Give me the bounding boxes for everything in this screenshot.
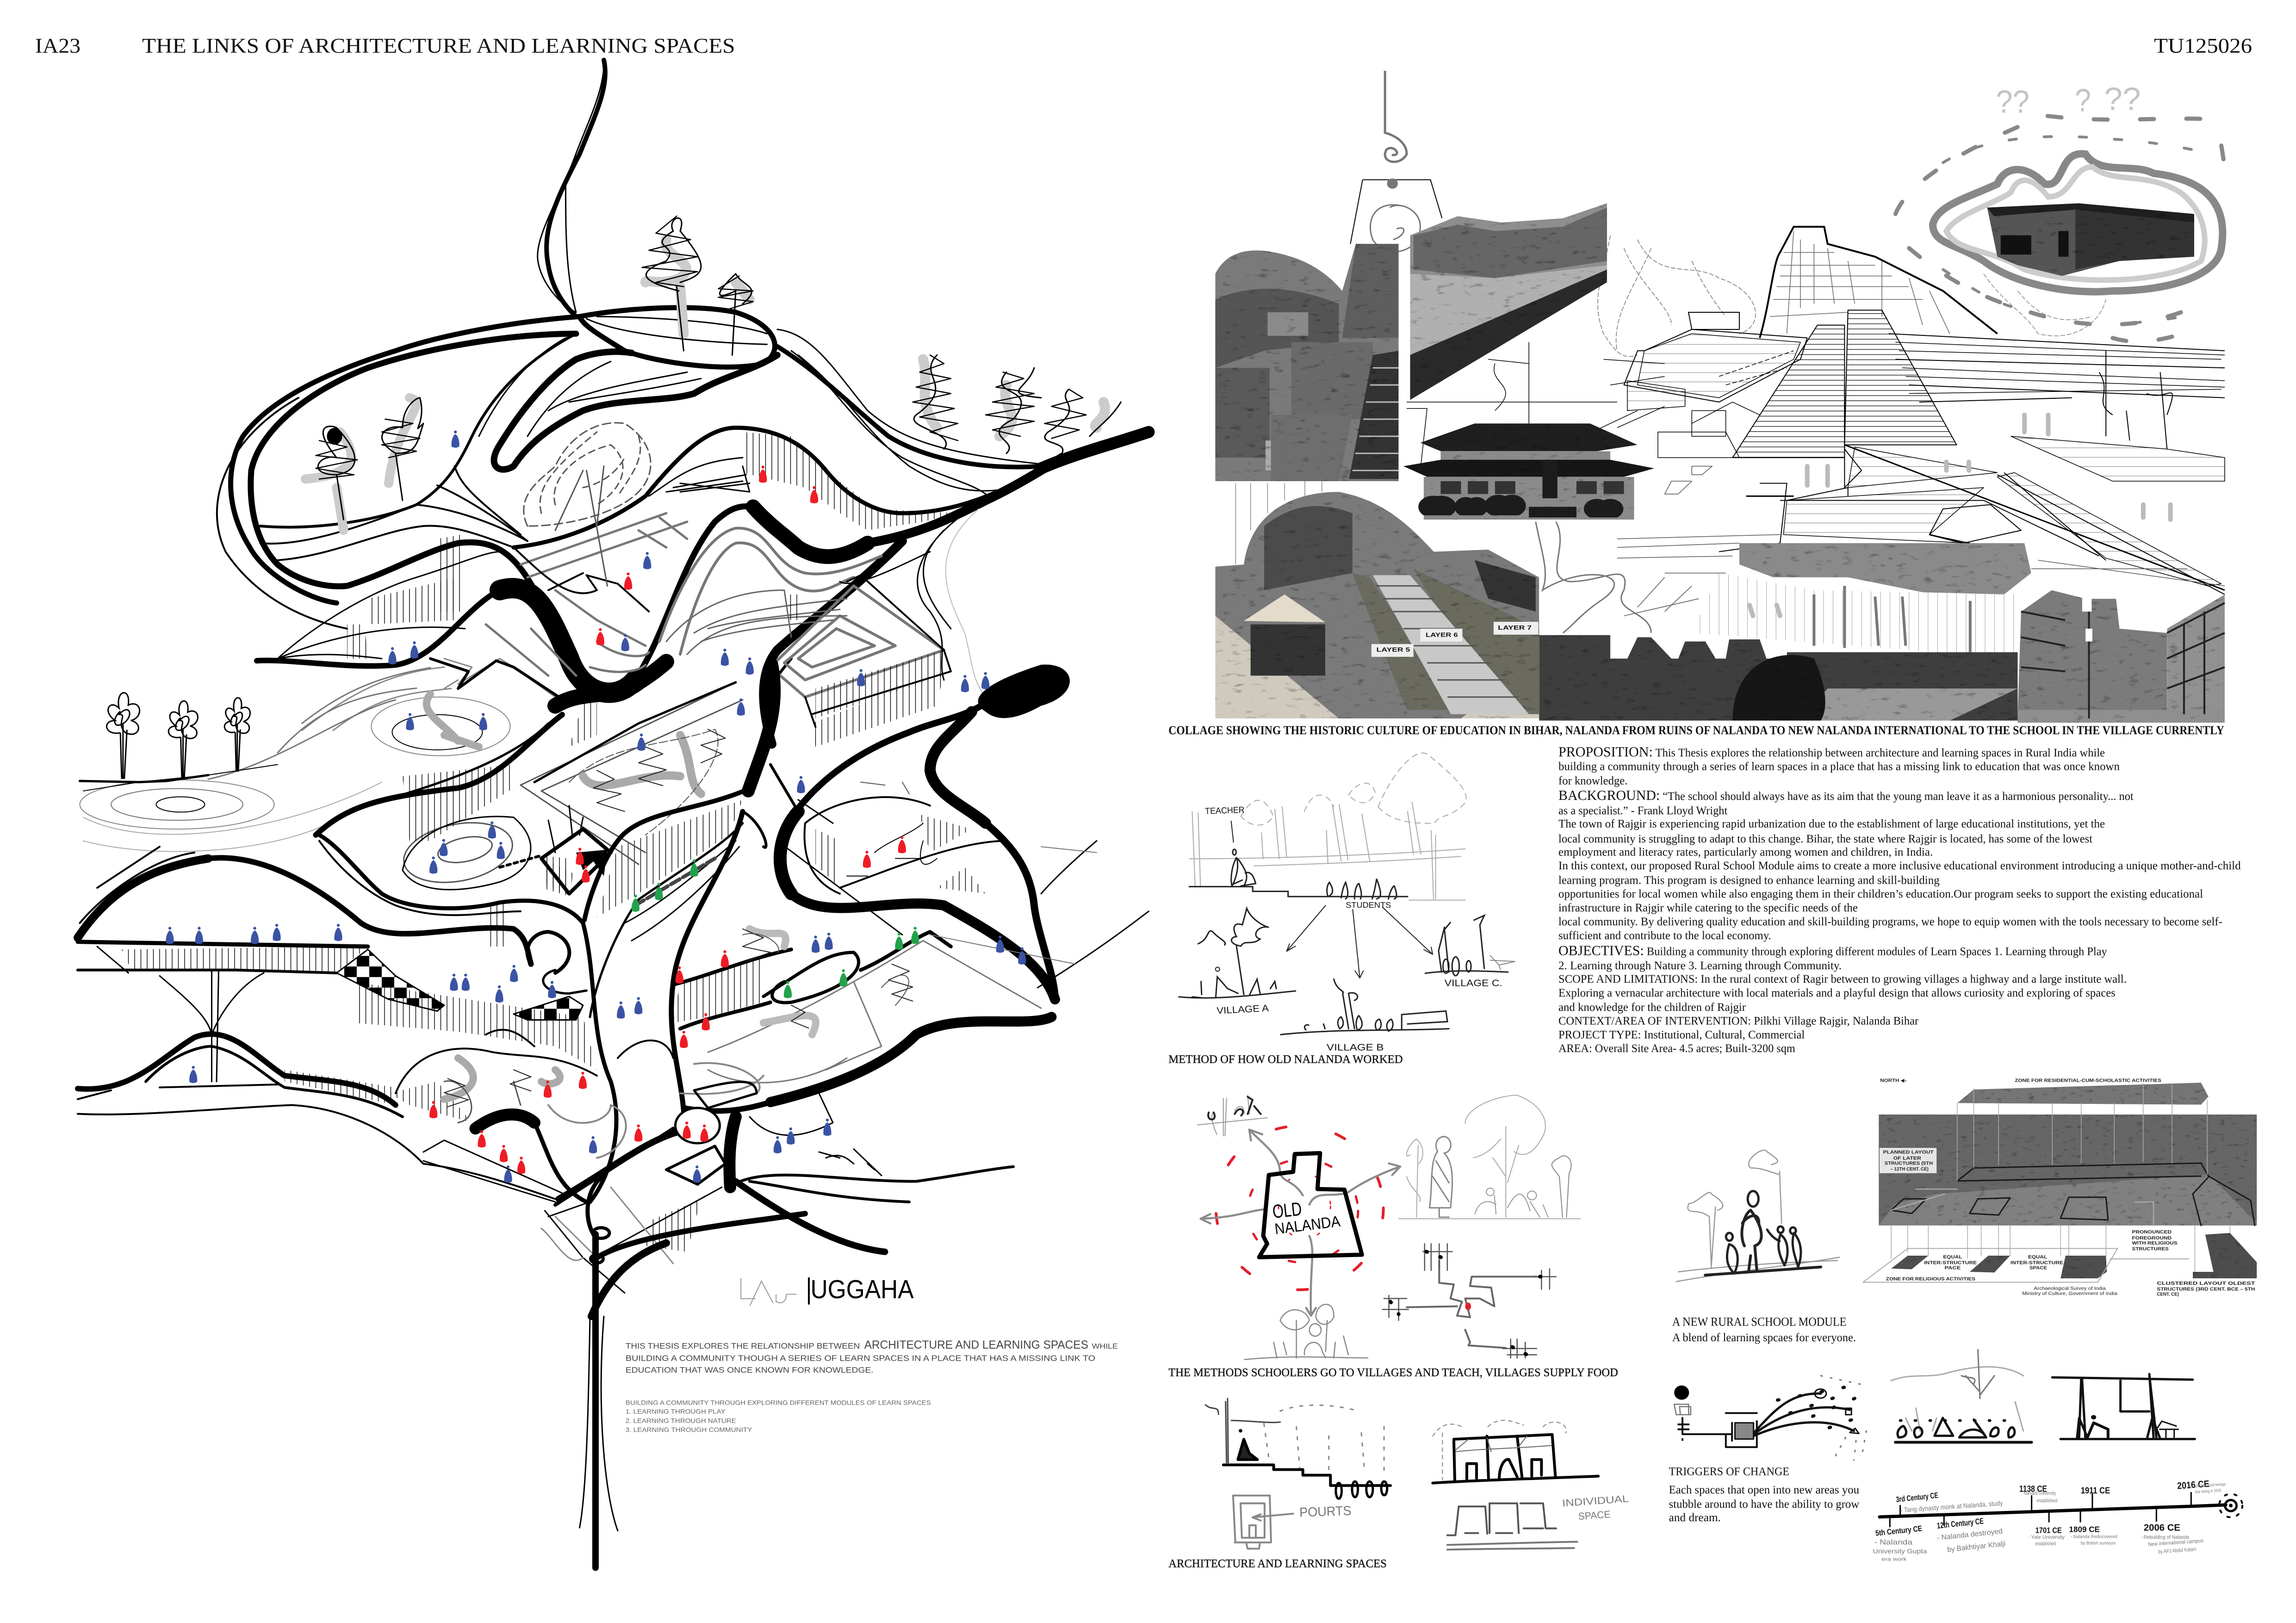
text block: thesis statement: EDUCATION THAT WAS ONCE KNOWN FOR KNOWLEDGE. [626, 1365, 874, 1375]
text block: thesis proposition and brief: as a specialist.” - Frank Lloyd Wright [1558, 804, 1727, 817]
site diagram labels: ZONE FOR RELIGIOUS ACTIVITIES [1886, 1276, 1975, 1282]
sketch: triggers of change [1674, 1376, 1866, 1460]
text block: learning modules: 2. LEARNING THROUGH NATURE [626, 1417, 736, 1424]
caption: triggers of change [1669, 1465, 1860, 1524]
seated figures: blue [166, 430, 1026, 1183]
Old Nalanda label: NALANDA [1274, 1213, 1341, 1238]
sketch: schoolers going to villages [1198, 1095, 1629, 1549]
panel: historic collage [1215, 71, 2225, 723]
trees at upper right [912, 355, 1121, 453]
site diagram labels: EQUAL [1943, 1255, 1962, 1260]
sketch: shade structure section [2052, 1374, 2195, 1439]
site diagram labels: CLUSTERED LAYOUT OLDEST [2157, 1281, 2256, 1286]
chart: hand-drawn history timeline: - Tang dynasty monk at Nalanda, study [1900, 1500, 2003, 1514]
caption: method of old Nalanda: METHOD OF HOW OLD NALANDA WORKED [1168, 1053, 1403, 1066]
caption: schoolers methods: THE METHODS SCHOOLERS GO TO VILLAGES AND TEACH, VILLAGES SUPPLY FOOD [1168, 1366, 1618, 1379]
text block: thesis proposition and brief: and knowledge for the children of Rajgir [1558, 1001, 1746, 1014]
photo: brick wall [1410, 203, 1607, 400]
seated figures: green [632, 860, 919, 998]
chart: hand-drawn history timeline: New international campus [2148, 1538, 2204, 1548]
site diagram labels: OF LATER [1893, 1156, 1922, 1161]
chart: hand-drawn history timeline: University Gupta [1873, 1548, 1927, 1555]
site diagram labels: ◀– [1900, 1078, 1907, 1084]
spiral ornament and frame [1350, 71, 1442, 252]
caption: triggers of change: stubble around to have the ability to grow [1669, 1498, 1860, 1511]
site diagram labels: PLANNED LAYOUT [1883, 1150, 1934, 1155]
Old Nalanda label [1272, 1198, 1341, 1238]
river line drawing [1536, 522, 1651, 633]
aerial site photo [1879, 1083, 2257, 1278]
text block: thesis proposition and brief: employment and literacy rates, particularly among women and children, in India. [1558, 846, 1933, 859]
photo: excavated layers [1215, 492, 1539, 719]
text block: thesis statement [626, 1338, 1118, 1375]
caption: new rural school module: A NEW RURAL SCHOOL MODULE [1672, 1315, 1846, 1329]
site diagram labels: Archaeological Survey of India [2034, 1286, 2106, 1291]
caption: triggers of change: and dream. [1669, 1511, 1721, 1524]
site diagram labels: INTER-STRUCTURE [2011, 1261, 2063, 1266]
upper canopy linework [217, 60, 1148, 744]
chart: hand-drawn history timeline: UNESCO World Heritage [2195, 1482, 2226, 1488]
chart: hand-drawn history timeline: - Rebuilding of Nalanda [2141, 1535, 2190, 1540]
site diagram labels: INTER-STRUCTURE [1924, 1261, 1977, 1266]
roofed cells section [1433, 1435, 1598, 1483]
site diagram labels: STRUCTURES (5TH [1885, 1161, 1933, 1166]
text block: thesis proposition and brief: AREA: Overall Site Area- 4.5 acres; Built-3200 sqm [1558, 1042, 1795, 1055]
photo: new Nalanda campus [1539, 635, 2017, 720]
sketch label: individual space [1562, 1493, 1629, 1522]
text block: thesis proposition and brief: BACKGROUND: “The school should always have as its aim that the young man leave it as a harmonious personality... not [1558, 787, 2134, 803]
chart: hand-drawn history timeline: established [2035, 1541, 2056, 1547]
text block: thesis statement: WHILE [1092, 1343, 1118, 1350]
thick flowing strokes [316, 715, 562, 835]
text block: thesis proposition and brief: OBJECTIVES: Building a community through exploring different modules of Learn Spaces 1. Learning through Play [1558, 942, 2107, 958]
chart: hand-drawn history timeline: by British surveyor [2081, 1541, 2116, 1546]
sketch label: courts: POURTS [1299, 1504, 1352, 1520]
chart: hand-drawn history timeline: 1701 CE [2035, 1525, 2062, 1535]
collage caption: COLLAGE SHOWING THE HISTORIC CULTURE OF EDUCATION IN BIHAR, NALANDA FROM RUINS OF NALANDA TO NEW NALANDA INTERNATIONAL TO THE SCHOOL IN THE VILLAGE CURRENTLY [1168, 724, 2224, 737]
tag: layer 6 [1420, 629, 1462, 642]
layer tags: LAYER 7 [1498, 624, 1532, 631]
site diagram labels: CENT. CE) [2157, 1292, 2179, 1297]
Old Nalanda outline [1259, 1153, 1362, 1257]
photo: new Nalanda temple [1403, 423, 1655, 520]
chart: hand-drawn history timeline: - Nalanda destroyed [1936, 1527, 2003, 1542]
cells plan [1447, 1503, 1556, 1535]
photo: seminar strip [1739, 543, 2031, 595]
section sketch with teacher [1223, 1465, 1390, 1486]
lower canopy and trunk linework [78, 662, 1148, 1567]
swirl around the village school [1895, 116, 2225, 341]
sketch labels: VILLAGE B [1327, 1042, 1384, 1053]
grey routes [1201, 1130, 1400, 1316]
site diagram labels: WITH RELIGIOUS [2132, 1241, 2178, 1246]
chart: hand-drawn history timeline: - Nalanda Rediscovered [2071, 1534, 2117, 1539]
site diagram labels: NORTH [1880, 1078, 1899, 1084]
text block: thesis proposition and brief: local community. By delivering quality education and skill-building programs, we hope to equip women with the tools necessary to become self- [1558, 915, 2222, 928]
chart: hand-drawn history timeline: 1138 CE [2019, 1485, 2047, 1494]
text block: thesis proposition and brief: Exploring a vernacular architecture with local materials and a playful design that allows curiosity and exploring of spaces [1558, 986, 2116, 999]
chart: hand-drawn history timeline: by APJ Abdul Kalam [2158, 1547, 2197, 1555]
chart: hand-drawn history timeline: 12th Century CE [1936, 1516, 1984, 1530]
site diagram labels: STRUCTURES [2132, 1247, 2169, 1252]
site diagram labels: EQUAL [2028, 1255, 2047, 1260]
text block: thesis proposition and brief: local community is struggling to adapt to this change. Bihar, the state where Rajgir is located, has some of the lowest [1558, 832, 2092, 845]
question marks above the school: ?? [1996, 84, 2029, 120]
text block: thesis proposition and brief: building a community through a series of learn spaces in a place that has a missing link to education that was once known [1558, 760, 2120, 773]
sketch label: individual space: SPACE [1578, 1509, 1611, 1522]
sketch: learning under a tree [1891, 1350, 2032, 1442]
chart: hand-drawn history timeline: era work [1881, 1556, 1907, 1562]
chart: hand-drawn history timeline: - Yale University [2028, 1535, 2065, 1540]
tag: layer 7 [1494, 622, 1539, 635]
text block: thesis proposition and brief: for knowledge. [1558, 774, 1627, 787]
header: project code: IA23 [35, 34, 81, 57]
caption: triggers of change: Each spaces that open into new areas you [1669, 1483, 1859, 1496]
seated figures: red [429, 465, 906, 1174]
text block: thesis proposition and brief: 2. Learning through Nature 3. Learning through Community. [1558, 959, 1842, 972]
logo: LAG JUGGAHA [741, 1275, 914, 1306]
question marks above the school [1996, 81, 2141, 120]
plaza and building wedge [521, 682, 743, 864]
question marks above the school: ? [2075, 82, 2091, 118]
layer tags [1377, 624, 1532, 653]
question marks above the school: ?? [2104, 81, 2141, 117]
text block: thesis statement: ARCHITECTURE AND LEARNING SPACES [864, 1338, 1088, 1351]
site diagram labels: Ministry of Culture, Government of India [2022, 1291, 2117, 1296]
layer tags: LAYER 6 [1426, 632, 1458, 638]
photo: new school dark doors [2001, 231, 2069, 257]
logo: LAG JUGGAHA: UGGAHA [811, 1275, 914, 1304]
photo: current village school [1987, 203, 2194, 276]
stupa line drawing [1407, 227, 2225, 658]
chart: hand-drawn history timeline: 5th Century CE [1875, 1524, 1923, 1538]
caption: new rural school module: A blend of learning spcaes for everyone. [1672, 1331, 1856, 1344]
site diagram labels: PRONOUNCED [2132, 1230, 2172, 1235]
chart: hand-drawn history timeline: by Bakhtiyar Khalji [1947, 1540, 2006, 1554]
tag: layer 5 [1371, 644, 1414, 657]
site diagram labels: ZONE FOR RESIDENTIAL-CUM-SCHOLASTIC ACTIVITIES [2015, 1078, 2161, 1084]
chart: hand-drawn history timeline [1873, 1479, 2242, 1562]
text block: thesis statement: BUILDING A COMMUNITY THOUGH A SERIES OF LEARN SPACES IN A PLACE THAT HAS A MISSING LINK TO [626, 1353, 1095, 1363]
text block: thesis proposition and brief: The town of Rajgir is experiencing rapid urbanization due to the establishment of large educational institutions, yet the [1558, 818, 2105, 830]
chart: hand-drawn history timeline: 2006 CE [2144, 1523, 2180, 1533]
caption: new rural school module [1672, 1315, 1856, 1344]
chart: hand-drawn history timeline: - Nalanda [1874, 1539, 1912, 1547]
text block: thesis proposition and brief: learning program. This program is designed to enhance learning and skill-building [1558, 873, 1940, 886]
text block: learning modules: 1. LEARNING THROUGH PLAY [626, 1408, 726, 1415]
text block: thesis proposition and brief: PROJECT TYPE: Institutional, Cultural, Commercial [1558, 1028, 1805, 1041]
sketch labels: TEACHER [1205, 805, 1245, 817]
text block: thesis proposition and brief: PROPOSITION: This Thesis explores the relationship between architecture and learning spaces in Rural India while [1558, 743, 2105, 760]
dots for teaching groups [1390, 1251, 1554, 1357]
chart: hand-drawn history timeline: 1809 CE [2069, 1525, 2100, 1534]
trees inside the upper loop [305, 398, 423, 530]
chart: hand-drawn history timeline: established [2037, 1498, 2057, 1504]
text block: thesis proposition and brief: CONTEXT/AREA OF INTERVENTION: Pilkhi Village Rajgir, Nalanda Bihar [1558, 1014, 1919, 1027]
site diagram labels: STRUCTURES (3RD CENT. BCE – 5TH [2157, 1287, 2255, 1292]
text block: thesis statement: THIS THESIS EXPLORES THE RELATIONSHIP BETWEEN [626, 1341, 860, 1350]
panel: tree-shaped master drawing [78, 60, 1148, 1567]
site diagram labels: SPACE [2029, 1266, 2047, 1271]
site diagram labels: FOREGROUND [2132, 1236, 2172, 1241]
trees on the left shoulder [106, 693, 250, 779]
sketch labels: STUDENTS [1346, 900, 1391, 910]
chart: hand-drawn history timeline: 1911 CE [2081, 1486, 2110, 1496]
site diagram labels: – 12TH CENT. CE) [1890, 1167, 1929, 1172]
red dashed catchment rings [1216, 1126, 1384, 1290]
header: student code: TU125026 [2154, 34, 2252, 57]
text block: thesis proposition and brief: opportunities for local women while also engaging them in their children’s education.Our program seeks to support the existing educational [1558, 887, 2203, 900]
caption: architecture and learning spaces: ARCHITECTURE AND LEARNING SPACES [1168, 1557, 1387, 1570]
chart: hand-drawn history timeline: Site listing in 2016 [2195, 1488, 2222, 1494]
text block: thesis proposition and brief: In this context, our proposed Rural School Module aims to create a more inclusive educational environment introducing a unique mother-and-child [1558, 859, 2241, 872]
chart: hand-drawn history timeline: 3rd Century CE [1896, 1491, 1939, 1504]
header: title: THE LINKS OF ARCHITECTURE AND LEARNING SPACES [142, 34, 735, 57]
text block: learning modules: 3. LEARNING THROUGH COMMUNITY [626, 1426, 752, 1433]
photo: Ahmedabad brick campus [2017, 590, 2225, 723]
sketch labels: VILLAGE A [1216, 1003, 1269, 1016]
text block: thesis proposition and brief: infrastructure in Rajgir while catering to the specific needs of the [1558, 901, 1858, 914]
tree pair on the top [642, 216, 753, 355]
caption: triggers of change: TRIGGERS OF CHANGE [1669, 1465, 1789, 1478]
text block: thesis proposition and brief: sufficient and contribute to the local economy. [1558, 929, 1771, 942]
sketch labels: VILLAGE C. [1445, 978, 1502, 988]
site diagram labels [1880, 1078, 2256, 1297]
sketch: mother and children module [1676, 1150, 1839, 1282]
text block: thesis proposition and brief [1558, 743, 2241, 1055]
sketch label: individual space: INDIVIDUAL [1562, 1493, 1629, 1509]
text block: learning modules [626, 1399, 931, 1433]
central sketched tree [524, 423, 651, 586]
text block: thesis proposition and brief: SCOPE AND LIMITATIONS: In the rural context of Ragir between to growing villages a highway and a large institute wall. [1558, 973, 2127, 985]
chart: hand-drawn history timeline: 2016 CE [2177, 1479, 2209, 1491]
photo: stair ruins [1215, 244, 1399, 481]
chart: hand-drawn history timeline: Harvard University [2023, 1491, 2056, 1496]
text block: learning modules: BUILDING A COMMUNITY THROUGH EXPLORING DIFFERENT MODULES OF LEARN SPACES [626, 1399, 931, 1406]
sketch labels [1205, 805, 1502, 1053]
aerial outlines [1891, 1163, 2255, 1226]
site diagram labels: PACE [1945, 1266, 1961, 1271]
layer tags: LAYER 5 [1377, 646, 1410, 653]
panel: lower right sketches and site diagram [1669, 1078, 2257, 1562]
Old Nalanda label: OLD [1272, 1198, 1303, 1222]
sketch: method of old Nalanda [1179, 753, 1515, 1053]
